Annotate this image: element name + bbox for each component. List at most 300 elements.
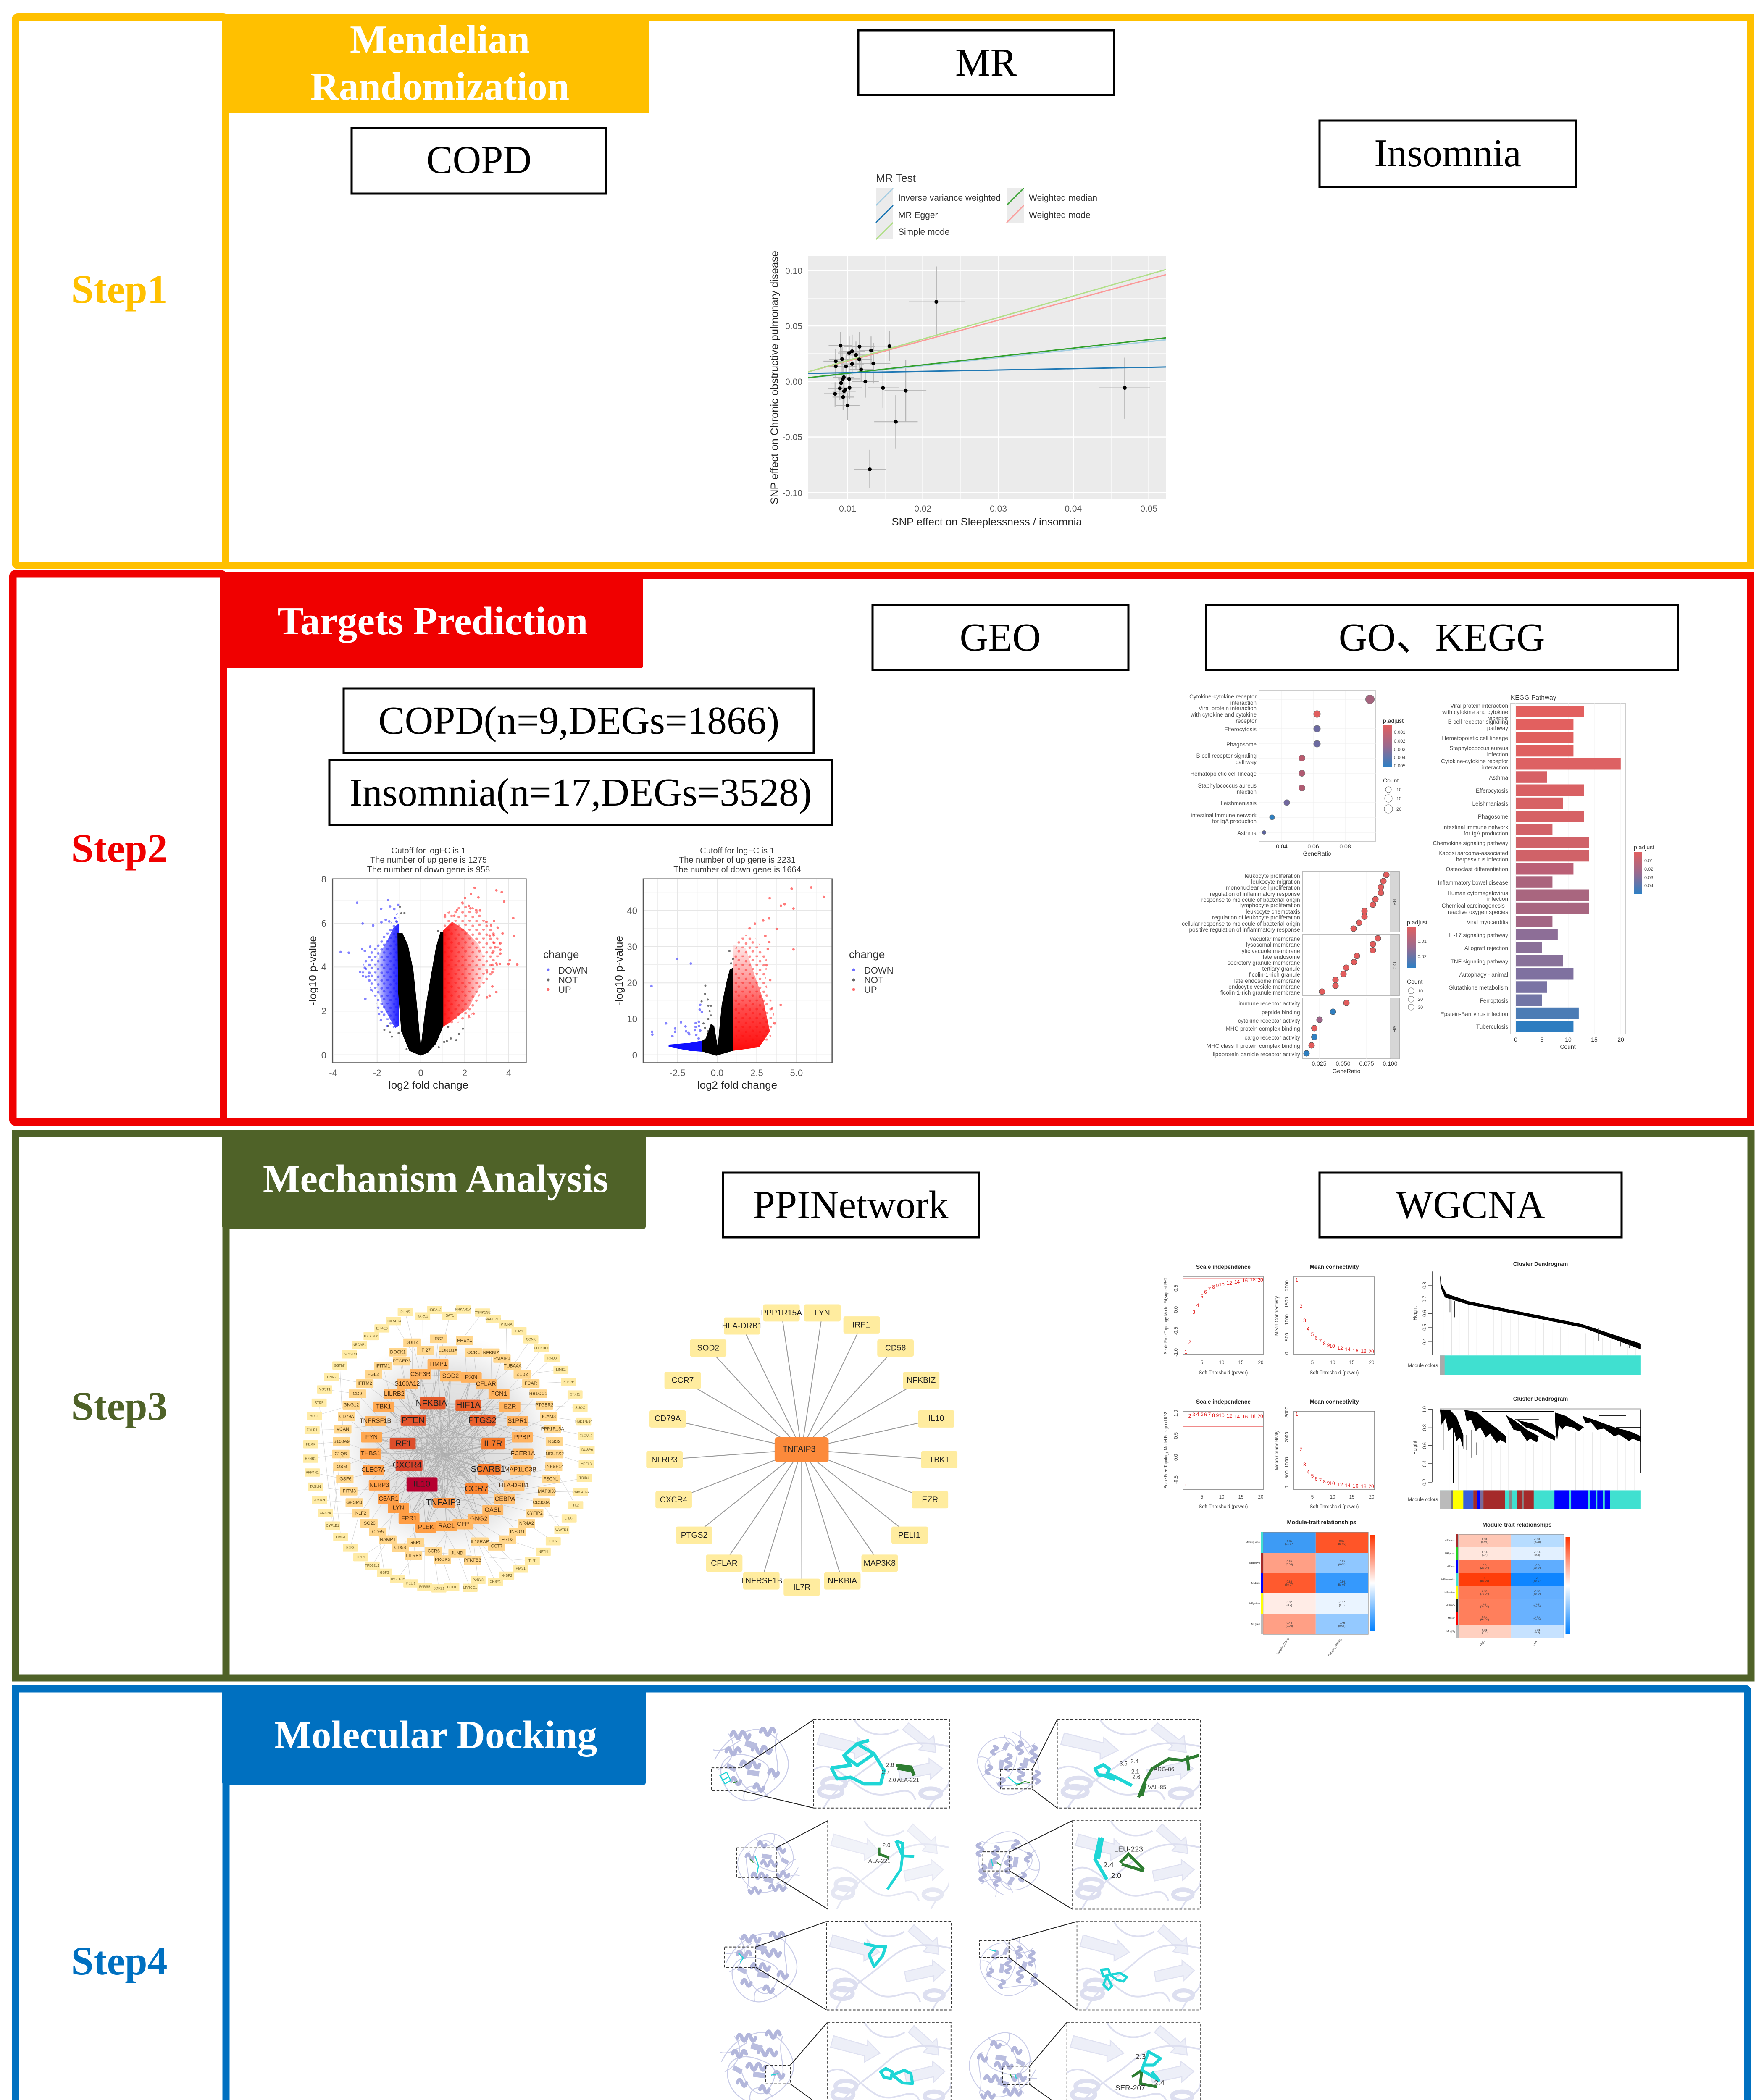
- bar chart legend: 0.04: [1644, 883, 1653, 888]
- chart: module-trait heatmap 2: 0.6: [1483, 1603, 1487, 1606]
- network: TNFAIP3 star: IL10: [928, 1414, 944, 1423]
- chart: KEGG bar chart: Inflammatory bowel disease: [1438, 879, 1508, 886]
- chart: WGCNA scale independence and connectivity plots: 4: [1307, 1326, 1310, 1332]
- chart: module-trait heatmap 2: (0.4): [1482, 1554, 1488, 1557]
- hub nodes: HIF1A: [456, 1400, 481, 1410]
- chart: WGCNA scale independence and connectivity plots: 9: [1327, 1480, 1330, 1486]
- label box: Insomnia DEGs: Insomnia(n=17,DEGs=3528): [350, 771, 812, 814]
- volcano legend: NOT: [558, 975, 578, 985]
- bar chart legend: 0.03: [1644, 875, 1653, 880]
- chart: WGCNA scale independence and connectivity plots: 5: [1311, 1331, 1314, 1337]
- docking row 3 left: [725, 1922, 952, 2010]
- volcano axes: 4: [506, 1068, 511, 1078]
- chart: module-trait heatmap 1: MEbrown: [1249, 1562, 1260, 1564]
- volcano axes: 6: [321, 918, 326, 929]
- hub nodes: PTEN: [402, 1415, 425, 1425]
- volcano title: The number of down gene is 1664: [673, 865, 801, 874]
- axis labels: -0.05: [782, 433, 802, 442]
- outer ring nodes: EIF4E3: [376, 1326, 388, 1330]
- docking row 1 left: 2.7: [882, 1769, 890, 1775]
- outer ring nodes: FOLR1: [307, 1428, 318, 1432]
- chart: WGCNA scale independence and connectivity plots: Mean connectivity: [1309, 1264, 1359, 1270]
- chart: GO dot plot: CC: [1392, 962, 1397, 969]
- second ring nodes: NAMPT: [380, 1537, 396, 1542]
- docking row 2 right: 2.4: [1103, 1861, 1114, 1869]
- chart: WGCNA scale independence and connectivity plots: 5: [1201, 1495, 1203, 1500]
- chart: WGCNA scale independence and connectivity plots: 14: [1234, 1279, 1240, 1285]
- volcano axes: 0: [632, 1050, 637, 1060]
- chart: module-trait heatmap 2: (9e-04): [1533, 1618, 1541, 1621]
- outer ring nodes: YARS2: [417, 1315, 429, 1318]
- network: TNFAIP3 star: CFLAR: [711, 1559, 738, 1568]
- outer ring nodes: LRP1: [357, 1555, 365, 1559]
- outer ring nodes: WWTR1: [555, 1528, 568, 1532]
- chart: WGCNA scale independence and connectivity plots: -1.0: [1174, 1348, 1179, 1357]
- chart: KEGG bar chart: for IgA production: [1464, 830, 1508, 837]
- outer ring nodes: GSTM4: [334, 1364, 346, 1368]
- network: TNFAIP3 star: EZR: [922, 1495, 938, 1504]
- chart: KEGG dot plot: interaction: [1230, 700, 1257, 706]
- outer ring nodes: RYBP: [315, 1401, 324, 1404]
- chart: WGCNA scale independence and connectivity plots: 3000: [1285, 1407, 1290, 1418]
- outer ring nodes: HSD17B14: [575, 1420, 592, 1423]
- volcano axes: [321, 874, 511, 1078]
- chart: module-trait heatmap 1: -0.83: [1286, 1540, 1293, 1543]
- chart: WGCNA scale independence and connectivity plots: 10: [1219, 1282, 1225, 1288]
- volcano title: [367, 846, 490, 874]
- chart: module-trait heatmap 1: MEblue: [1251, 1582, 1260, 1585]
- volcano axes: 40: [627, 906, 637, 916]
- chart: GO dot plot: 0.075: [1359, 1060, 1374, 1067]
- chart: WGCNA scale independence and connectivity plots: 6: [1315, 1476, 1318, 1482]
- network: TNFAIP3 star: MAP3K8: [864, 1559, 896, 1568]
- dot plot legend: 0.003: [1394, 747, 1406, 752]
- second ring nodes: IFITM2: [358, 1381, 372, 1386]
- chart: WGCNA scale independence and connectivity plots: 15: [1238, 1360, 1243, 1365]
- chart: WGCNA scale independence and connectivity plots: 2: [1300, 1303, 1303, 1309]
- chart: KEGG bar chart: Leishmaniasis: [1472, 801, 1508, 807]
- chart: WGCNA scale independence and connectivity plots: Scale Free Topology Model Fit,signed R^2: [1164, 1412, 1169, 1488]
- chart: WGCNA scale independence and connectivity plots: 0.0: [1174, 1306, 1179, 1313]
- network: TNFAIP3 star: HLA-DRB1: [722, 1321, 762, 1331]
- heading: Molecular Docking: Molecular Docking: [274, 1713, 597, 1757]
- chart: module-trait heatmap 2: -0.21: [1534, 1629, 1541, 1632]
- chart: WGCNA cluster dendrograms: 0.7: [1422, 1296, 1427, 1302]
- docking row 4 right: [969, 2022, 1201, 2100]
- outer ring nodes: NAPEPLD: [485, 1318, 501, 1321]
- volcano legend: UP: [558, 984, 571, 995]
- hub nodes: IRF1: [393, 1439, 412, 1449]
- chart: KEGG dot plot: [1189, 691, 1406, 857]
- volcano legend: change: [543, 948, 579, 961]
- chart: KEGG bar chart: Osteoclast differentiation: [1446, 866, 1508, 872]
- chart: WGCNA scale independence and connectivity plots: 12: [1226, 1280, 1232, 1286]
- chart: WGCNA scale independence and connectivity plots: 12: [1337, 1345, 1343, 1351]
- outer ring nodes: CCNK: [526, 1337, 536, 1341]
- chart: WGCNA scale independence and connectivity plots: 4: [1307, 1469, 1310, 1475]
- chart: WGCNA scale independence and connectivity plots: 15: [1349, 1360, 1354, 1365]
- docking row 1 right: ARG-86: [1154, 1766, 1174, 1772]
- chart: WGCNA scale independence and connectivity plots: Mean connectivity: [1309, 1399, 1359, 1405]
- chart: WGCNA cluster dendrograms: 0.8: [1422, 1282, 1427, 1289]
- outer ring nodes: CKAP4: [320, 1511, 331, 1515]
- third ring nodes: S100A12: [394, 1381, 420, 1387]
- axis labels: SNP effect on Chronic obstructive pulmonary disease: [769, 251, 781, 504]
- chart: GO dot plot: leukocyte migration: [1251, 879, 1300, 885]
- chart: WGCNA scale independence and connectivity plots: 3: [1303, 1318, 1306, 1323]
- chart: module-trait heatmap 1: (0.04): [1338, 1563, 1345, 1566]
- chart: WGCNA cluster dendrograms: 0.4: [1422, 1460, 1427, 1467]
- chart: KEGG bar chart: [1433, 694, 1654, 1050]
- chart: GO dot plot: leukocyte chemotaxis: [1246, 908, 1300, 915]
- hub nodes: CXCR4: [392, 1460, 422, 1470]
- axis labels: 0.04: [1065, 504, 1082, 514]
- chart: GO dot plot: endocytic vesicle membrane: [1228, 984, 1300, 990]
- second ring nodes: IFI27: [420, 1348, 431, 1353]
- chart: WGCNA cluster dendrograms: Cluster Dendrogram: [1513, 1396, 1568, 1402]
- third ring nodes: FPR1: [401, 1515, 417, 1522]
- third ring nodes: CSF3R: [410, 1371, 431, 1378]
- chart: WGCNA scale independence and connectivity plots: 10: [1330, 1495, 1335, 1500]
- chart: KEGG bar chart: Cytokine-cytokine receptor: [1441, 758, 1508, 764]
- panel: step 2 frame: [13, 574, 1751, 1122]
- chart: WGCNA scale independence and connectivity plots: 0.5: [1174, 1432, 1179, 1439]
- second ring nodes: ZEB2: [517, 1372, 528, 1377]
- chart: WGCNA scale independence and connectivity plots: 1: [1184, 1349, 1187, 1355]
- network: TNFAIP3 star: PTGS2: [681, 1530, 707, 1540]
- heading: Targets Prediction: [220, 572, 643, 668]
- second ring nodes: IFITM1: [376, 1363, 390, 1368]
- network: TNFAIP3 star: PELI1: [898, 1530, 920, 1540]
- dot plot legend: 0.005: [1394, 764, 1406, 769]
- chart: KEGG bar chart: Intestinal immune network: [1442, 824, 1508, 830]
- chart: KEGG bar chart: Viral myocarditis: [1467, 919, 1508, 925]
- label box: Insomnia: [1320, 121, 1576, 187]
- heading: Molecular Docking: [222, 1687, 646, 1785]
- chart: module-trait heatmap 1: Sample_Healthy: [1328, 1638, 1343, 1657]
- chart: volcano plot Insomnia: log2 fold change: [697, 1079, 777, 1091]
- hub nodes: CCR7: [465, 1484, 488, 1494]
- chart: module-trait heatmap 2: -0.14: [1534, 1551, 1541, 1554]
- second ring nodes: PMAIP1: [494, 1356, 510, 1361]
- chart: KEGG dot plot: Phagosome: [1226, 741, 1257, 748]
- outer ring nodes: FARSB: [419, 1585, 430, 1589]
- chart: GO dot plot: peptide binding: [1262, 1009, 1300, 1016]
- dot plot legend: 20: [1396, 807, 1401, 812]
- chart: module-trait heatmap 2: MEblue: [1447, 1566, 1456, 1568]
- chart: WGCNA scale independence and connectivity plots: Scale independence: [1196, 1264, 1251, 1270]
- second ring nodes: ICAM3: [542, 1414, 556, 1419]
- chart: WGCNA scale independence and connectivity plots: 14: [1345, 1483, 1351, 1488]
- chart: KEGG bar chart: Count: [1560, 1043, 1576, 1050]
- chart: KEGG dot plot: B cell receptor signaling: [1196, 753, 1257, 759]
- volcano axes: -4: [329, 1068, 337, 1078]
- chart: module-trait heatmap 2: MEgrey: [1446, 1630, 1455, 1633]
- outer ring nodes: CYP1B1: [326, 1524, 339, 1528]
- chart: module-trait heatmap 1: 0.52: [1287, 1560, 1292, 1563]
- chart: GO dot plot: leukocyte proliferation: [1245, 873, 1300, 879]
- second ring nodes: NR4A2: [519, 1521, 534, 1526]
- outer ring nodes: YPEL3: [581, 1462, 592, 1466]
- figure: molecular docking panels: [712, 1719, 1201, 2100]
- heading: Mendelian Randomization: [222, 14, 649, 113]
- network: TNFAIP3 star: IL7R: [793, 1583, 810, 1592]
- chart: WGCNA cluster dendrograms: Module colors: [1408, 1497, 1438, 1502]
- chart: volcano plot COPD: [307, 846, 588, 1091]
- chart: GO dot plot: [1182, 872, 1427, 1074]
- chart: WGCNA scale independence and connectivity plots: 20: [1368, 1349, 1374, 1354]
- docking row 2 right: [977, 1821, 1201, 1909]
- third ring nodes: PLEK: [418, 1524, 434, 1531]
- chart: WGCNA scale independence and connectivity plots: 1: [1296, 1411, 1299, 1417]
- outer ring nodes: CHSY1: [490, 1580, 501, 1584]
- hub nodes: IL7R: [484, 1439, 502, 1449]
- chart: WGCNA scale independence and connectivity plots: Soft Threshold (power): [1310, 1370, 1359, 1376]
- chart: WGCNA scale independence and connectivity plots: 1: [1184, 1483, 1187, 1489]
- second ring nodes: IFITM3: [342, 1488, 356, 1494]
- chart: WGCNA scale independence and connectivity plots: 4: [1196, 1302, 1199, 1308]
- chart: GO dot plot: 0.100: [1383, 1060, 1398, 1067]
- third ring nodes: TIMP1: [429, 1361, 447, 1368]
- chart: WGCNA scale independence and connectivity plots: 16: [1353, 1348, 1359, 1354]
- volcano axes: 2: [321, 1006, 326, 1016]
- outer ring nodes: PRKAR1A: [455, 1307, 471, 1311]
- chart: KEGG dot plot: Leishmaniasis: [1220, 800, 1257, 806]
- legend: MR Test: [876, 172, 1097, 239]
- chart: WGCNA scale independence and connectivity plots: 0.5: [1174, 1285, 1179, 1292]
- axis labels: 0.02: [914, 504, 931, 514]
- chart: WGCNA scale independence and connectivity plots: 15: [1349, 1495, 1354, 1500]
- chart: module-trait heatmap 1: (8e-07): [1338, 1543, 1346, 1546]
- chart: module-trait heatmap 2: [1441, 1522, 1570, 1647]
- panel: step 4 frame: [16, 1689, 1748, 2100]
- docking row 1 left: 2.6: [886, 1762, 894, 1768]
- hub nodes: IL10: [413, 1479, 430, 1489]
- second ring nodes: FGL2: [368, 1372, 379, 1377]
- chart: WGCNA scale independence and connectivity plots: 9: [1327, 1342, 1330, 1348]
- chart: WGCNA scale independence and connectivity plots: 18: [1250, 1413, 1256, 1419]
- chart: WGCNA scale independence and connectivity plots: Mean Connectivity: [1275, 1296, 1280, 1336]
- chart: WGCNA scale independence and connectivity plots: 10: [1219, 1495, 1224, 1500]
- network: TNFAIP3 star: CD58: [885, 1344, 906, 1353]
- chart: module-trait heatmap 2: (7e-04): [1533, 1593, 1541, 1596]
- docking row 1 left: [712, 1719, 949, 1808]
- chart: WGCNA scale independence and connectivity plots: 16: [1242, 1414, 1248, 1420]
- chart: WGCNA scale independence and connectivity plots: 10: [1329, 1480, 1335, 1486]
- second ring nodes: CYFIP2: [527, 1511, 543, 1516]
- chart: module-trait heatmap 1: 0.83: [1339, 1540, 1345, 1543]
- second ring nodes: C1QB: [334, 1452, 347, 1457]
- chart: WGCNA scale independence and connectivity plots: 12: [1226, 1413, 1232, 1419]
- second ring nodes: MAP3K8: [538, 1489, 556, 1494]
- third ring nodes: CEBPA: [495, 1496, 515, 1502]
- third ring nodes: OASL: [485, 1507, 501, 1513]
- chart: KEGG bar chart: TNF signaling pathway: [1451, 958, 1508, 965]
- chart: KEGG dot plot: Viral protein interaction: [1199, 705, 1257, 711]
- chart: KEGG bar chart: pathway: [1487, 725, 1508, 731]
- chart: KEGG bar chart: infection: [1487, 751, 1508, 758]
- second ring nodes: FCAR: [525, 1381, 537, 1386]
- second ring nodes: DOCK1: [390, 1349, 406, 1354]
- chart: WGCNA scale independence and connectivity plots: 3: [1303, 1462, 1306, 1467]
- chart: module-trait heatmap 2: 0.56: [1482, 1616, 1488, 1619]
- axis labels: -0.10: [782, 488, 802, 498]
- chart: module-trait heatmap 2: (8e-07): [1480, 1580, 1489, 1583]
- step label: Step4: Step4: [71, 1938, 168, 1983]
- outer ring nodes: GBP3: [380, 1571, 389, 1575]
- chart: WGCNA scale independence and connectivity plots: 0.0: [1174, 1454, 1179, 1461]
- chart: module-trait heatmap 2: MEyellow: [1444, 1592, 1456, 1594]
- third ring nodes: MAP1LC3B: [505, 1467, 536, 1473]
- chart: WGCNA scale independence and connectivity plots: 15: [1238, 1495, 1243, 1500]
- volcano title: Cutoff for logFC is 1: [700, 846, 775, 856]
- bar chart legend: [1634, 844, 1654, 894]
- second ring nodes: PPP1R15A: [541, 1426, 564, 1431]
- second ring nodes: IGSF6: [338, 1477, 352, 1482]
- label box: MR: MR: [955, 41, 1017, 84]
- axis labels: 0.00: [785, 377, 802, 387]
- label box: GO KEGG: GO、KEGG: [1339, 616, 1545, 659]
- outer ring nodes: RND3: [547, 1356, 557, 1360]
- second ring nodes: IRS2: [434, 1336, 444, 1341]
- volcano axes: 20: [627, 978, 637, 988]
- volcano axes: -2.5: [670, 1068, 686, 1078]
- volcano axes: 2: [462, 1068, 467, 1078]
- label box: Insomnia DEGs: [329, 760, 832, 825]
- volcano axes: [627, 906, 803, 1078]
- dot plot legend: 30: [1418, 1005, 1423, 1010]
- third ring nodes: S1PR1: [508, 1418, 527, 1425]
- chart: WGCNA scale independence and connectivity plots: 10: [1219, 1412, 1225, 1418]
- chart: WGCNA scale independence and connectivity plots: 16: [1242, 1278, 1248, 1284]
- second ring nodes: OSM: [337, 1464, 347, 1469]
- third ring nodes: TBK1: [376, 1403, 391, 1410]
- chart: module-trait heatmap 2: Low: [1533, 1640, 1538, 1646]
- chart: WGCNA cluster dendrograms: 0.2: [1422, 1479, 1427, 1486]
- chart: module-trait heatmap 2: (2e-04): [1480, 1605, 1489, 1608]
- second ring nodes: PTGER2: [535, 1403, 553, 1408]
- volcano legend: DOWN: [558, 965, 588, 976]
- outer ring nodes: CHD1: [447, 1586, 457, 1589]
- chart: volcano plot COPD: -log10 p-value: [307, 936, 319, 1005]
- chart: module-trait heatmap 2: (0.08): [1481, 1541, 1488, 1544]
- network: TNFAIP3 star: [646, 1305, 957, 1596]
- chart: WGCNA scale independence and connectivity plots: 10: [1329, 1343, 1335, 1349]
- label box: COPD: COPD: [426, 138, 531, 182]
- chart: WGCNA scale independence and connectivity plots: -0.5: [1174, 1475, 1179, 1484]
- chart: WGCNA cluster dendrograms: 0.6: [1422, 1442, 1427, 1449]
- chart: WGCNA scale independence and connectivity plots: Mean Connectivity: [1275, 1430, 1280, 1470]
- chart: WGCNA scale independence and connectivity plots: 8: [1323, 1341, 1326, 1347]
- axis labels: 0.05: [785, 322, 802, 331]
- label box: GEO: [873, 605, 1128, 670]
- chart: module-trait heatmap 2: (0.4): [1534, 1554, 1540, 1557]
- docking row 3 right: [980, 1922, 1201, 2010]
- chart: WGCNA scale independence and connectivity plots: 1000: [1285, 1314, 1290, 1325]
- axis labels: 0.01: [839, 504, 856, 514]
- docking row 1 right: 2.4: [1130, 1758, 1139, 1764]
- chart: WGCNA scale independence and connectivity plots: 0: [1285, 1486, 1290, 1488]
- volcano axes: 5.0: [790, 1068, 803, 1078]
- chart: WGCNA scale independence and connectivity plots: 500: [1285, 1333, 1290, 1341]
- chart: GO dot plot: tertiary granule: [1262, 966, 1300, 972]
- chart: module-trait heatmap 2: MEturquoise: [1441, 1579, 1456, 1581]
- label box: COPD DEGs: COPD(n=9,DEGs=1866): [379, 699, 779, 743]
- second ring nodes: FSCN1: [544, 1477, 558, 1482]
- chart: WGCNA cluster dendrograms: 1.0: [1422, 1406, 1427, 1413]
- second ring nodes: CD58: [394, 1545, 406, 1550]
- chart: WGCNA scale independence and connectivity plots: 20: [1369, 1360, 1374, 1365]
- third ring nodes: C5AR1: [379, 1496, 399, 1502]
- chart: GO dot plot: ficolin-1-rich granule: [1249, 971, 1300, 978]
- chart: module-trait heatmap 1: Module-trait relationships: [1287, 1519, 1357, 1525]
- heading: Mendelian Randomization: Randomization: [310, 65, 569, 108]
- chart: module-trait heatmap 2: Module-trait relationships: [1482, 1522, 1552, 1528]
- volcano legend: UP: [864, 984, 877, 995]
- bar chart legend: 0.01: [1644, 858, 1653, 864]
- second ring nodes: NFKBIZ: [483, 1350, 499, 1355]
- docking row 2 right: LEU-223: [1114, 1845, 1143, 1853]
- chart: WGCNA scale independence and connectivity plots: 16: [1353, 1483, 1359, 1489]
- panel: step 3 frame: [16, 1134, 1751, 1678]
- chart: KEGG dot plot: Hematopoietic cell lineage: [1190, 771, 1257, 777]
- network: TNFAIP3 star: CD79A: [655, 1414, 681, 1423]
- chart: module-trait heatmap 1: MEgrey: [1251, 1623, 1260, 1626]
- chart: WGCNA scale independence and connectivity plots: 20: [1369, 1495, 1374, 1500]
- docking row 1 left: ALA-221: [897, 1777, 919, 1783]
- outer ring nodes: NPTN: [539, 1550, 548, 1554]
- chart: KEGG bar chart: Chemokine signaling pathway: [1433, 840, 1508, 846]
- third ring nodes: CLEC7A: [361, 1467, 385, 1473]
- chart: KEGG dot plot: for IgA production: [1212, 818, 1257, 824]
- chart: module-trait heatmap 1: (5e-07): [1285, 1583, 1293, 1586]
- volcano data: [643, 879, 832, 1063]
- outer ring nodes: CNN2: [327, 1375, 337, 1379]
- chart: KEGG bar chart: Asthma: [1489, 774, 1508, 781]
- chart: WGCNA scale independence and connectivity plots: 5: [1311, 1495, 1314, 1500]
- chart: KEGG bar chart: Hematopoietic cell lineage: [1442, 735, 1508, 741]
- outer ring nodes: PIAS1: [516, 1567, 526, 1570]
- dot plot legend: [1383, 717, 1406, 813]
- step label: Step1: Step1: [71, 267, 168, 312]
- chart: WGCNA scale independence and connectivity plots: 1: [1296, 1277, 1299, 1283]
- chart: KEGG dot plot: Asthma: [1237, 830, 1257, 836]
- docking row 1 right: [978, 1719, 1201, 1808]
- hub nodes: SCARB1: [471, 1464, 505, 1474]
- chart: WGCNA scale independence and connectivity plots: -0.5: [1174, 1327, 1179, 1335]
- chart: GO dot plot: lysosomal membrane: [1246, 942, 1300, 948]
- chart: module-trait heatmap 1: (0.7): [1339, 1604, 1345, 1607]
- chart: GO dot plot: lymphocyte proliferation: [1240, 902, 1300, 908]
- chart: GO dot plot: regulation of inflammatory response: [1210, 891, 1300, 897]
- chart: KEGG bar chart: 5: [1541, 1036, 1544, 1043]
- third ring nodes: NLRP3: [369, 1482, 389, 1488]
- dot plot legend: 0.01: [1417, 939, 1427, 944]
- dot plot legend: 10: [1396, 788, 1401, 793]
- outer ring nodes: EIF5: [549, 1539, 557, 1543]
- chart: module-trait heatmap 1: [1246, 1519, 1375, 1657]
- chart: module-trait heatmap 1: 0.84: [1287, 1580, 1292, 1583]
- network: TNFAIP3 star: TBK1: [929, 1455, 949, 1464]
- chart: WGCNA cluster dendrograms: Height: [1413, 1441, 1418, 1455]
- plot panel and data: [808, 256, 1166, 499]
- chart: GO dot plot: MHC class II protein complex binding: [1207, 1043, 1300, 1049]
- chart: GO dot plot: lipoprotein particle receptor activity: [1213, 1051, 1300, 1058]
- hub nodes: NFKBIA: [416, 1399, 447, 1408]
- chart: module-trait heatmap 2: -0.56: [1534, 1616, 1541, 1619]
- chart: KEGG dot plot: 0.06: [1307, 843, 1319, 850]
- second ring nodes: CCR6: [428, 1549, 440, 1554]
